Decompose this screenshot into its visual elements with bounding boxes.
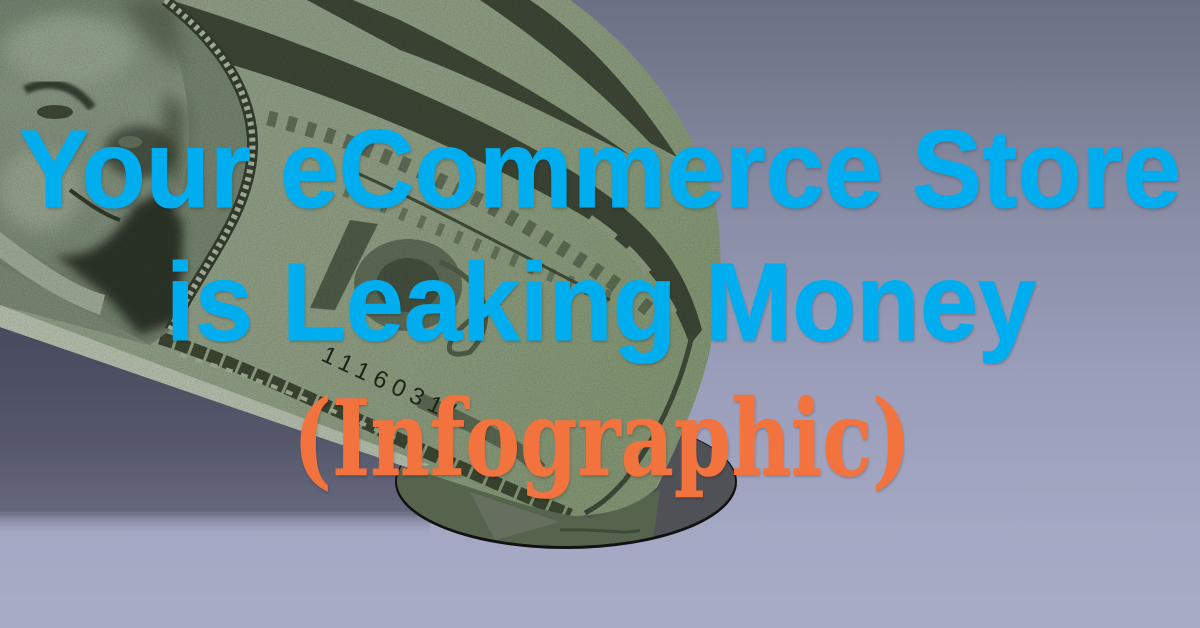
third bill security band xyxy=(170,0,702,345)
shadow cast by the bills xyxy=(0,316,440,535)
right edge sawtooth border and page edge xyxy=(584,340,694,516)
stack of dollar bills xyxy=(0,0,740,530)
lower bill edge: light strip and dark pattern xyxy=(0,305,570,515)
top bill security band xyxy=(480,0,677,157)
paper grain xyxy=(0,0,740,530)
title line 2: is Leaking Money xyxy=(166,241,1036,364)
serial number on the bill: 1116031/ xyxy=(317,341,465,429)
second bill security band xyxy=(307,0,630,155)
large numeral and treasury seal xyxy=(310,220,486,354)
lettering band: United States of America xyxy=(268,118,650,310)
portrait oval xyxy=(0,0,252,345)
title line 1: Your eCommerce Store xyxy=(19,108,1181,231)
subtitle: (Infographic): (Infographic) xyxy=(293,376,911,500)
drain xyxy=(395,434,737,549)
